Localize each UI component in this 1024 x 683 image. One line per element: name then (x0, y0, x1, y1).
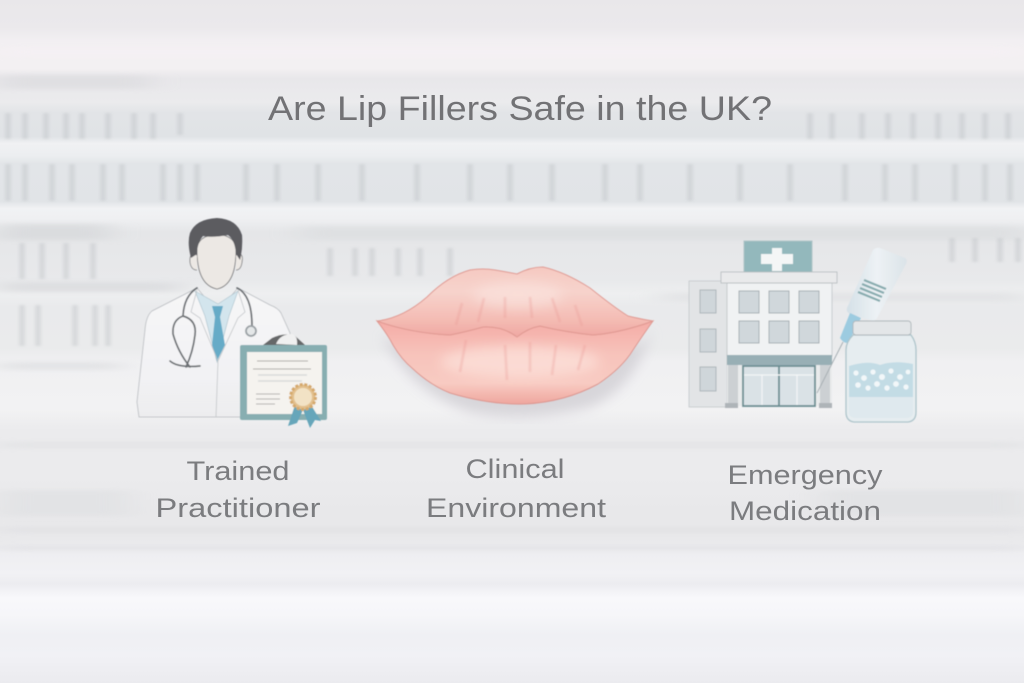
left wing windows (700, 290, 716, 391)
lip creases (456, 297, 585, 380)
sign with cross (744, 241, 812, 272)
label: clinical environment: Clinical (466, 454, 564, 484)
main windows (739, 291, 819, 343)
label: clinical environment: Environment (426, 493, 607, 523)
tie (212, 306, 225, 361)
lip shadow (382, 330, 652, 417)
entrance band (727, 355, 832, 365)
syringe coil (858, 280, 886, 301)
label: trained practitioner: Trained (186, 456, 290, 486)
main building (727, 283, 832, 356)
left wing (689, 281, 727, 407)
holding hand (263, 334, 305, 345)
lip highlight (473, 282, 563, 308)
label: trained practitioner (156, 456, 321, 523)
label: trained practitioner: Practitioner (156, 493, 321, 523)
certificate frame (240, 345, 327, 420)
label: emergency medication (728, 460, 883, 526)
stethoscope chest piece (246, 326, 256, 336)
stethoscope (170, 288, 252, 367)
coat lapels (191, 290, 245, 417)
neck and face (197, 234, 236, 289)
certificate text lines (253, 361, 311, 369)
shirt collar (195, 291, 238, 362)
certificate paper (247, 352, 322, 414)
lower lip highlight (440, 346, 600, 378)
vial cap (853, 321, 911, 335)
vial body (846, 335, 916, 422)
needle (817, 342, 843, 393)
columns (725, 365, 832, 408)
roof (721, 272, 837, 283)
illustration: trained practitioner with certificate (137, 218, 327, 428)
hair (189, 218, 242, 260)
syringe nozzle (840, 313, 861, 343)
vial lower fill (849, 397, 913, 418)
label: clinical environment (426, 454, 607, 523)
gold seal (290, 384, 316, 410)
illustration: clinic building, syringe and vial (689, 241, 916, 422)
lower floor (727, 365, 832, 406)
vial powder (849, 362, 913, 397)
entrance doors (743, 366, 815, 406)
illustration: lips (377, 267, 653, 417)
label: emergency medication: Medication (729, 496, 881, 526)
ears (190, 254, 242, 270)
title: Are Lip Fillers Safe in the UK? (268, 90, 772, 128)
label: emergency medication: Emergency (728, 460, 883, 490)
powder granules (853, 368, 910, 391)
doctor's white coat (137, 288, 290, 417)
ribbon (288, 405, 321, 428)
lower lip (377, 321, 653, 404)
upper lip (377, 267, 653, 337)
syringe barrel (847, 248, 907, 321)
